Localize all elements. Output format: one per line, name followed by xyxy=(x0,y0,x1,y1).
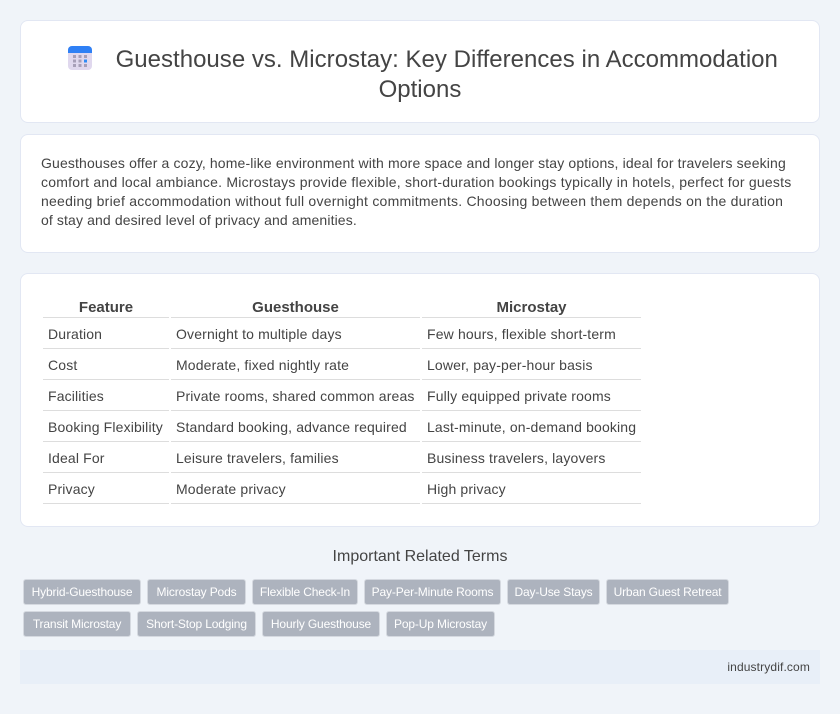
footer source: industrydif.com xyxy=(727,660,810,674)
table header: feature: Feature xyxy=(79,299,133,316)
intro text panel xyxy=(20,134,820,253)
text: Few hours, flexible short-term xyxy=(427,326,616,342)
text: Cost xyxy=(48,357,77,373)
tags: related terms: Pay-Per-Minute Rooms xyxy=(372,585,493,599)
text: Moderate, fixed nightly rate xyxy=(176,357,349,373)
title: Guesthouse vs. Microstay: Key Differences in Accommodation xyxy=(116,46,778,73)
text: Lower, pay-per-hour basis xyxy=(427,357,593,373)
text: Leisure travelers, families xyxy=(176,450,339,466)
footer bar xyxy=(20,650,820,684)
text: Ideal For xyxy=(48,450,105,466)
intro paragraph: Guesthouses offer a cozy, home-like environment with more space and longer stay options, ideal for travelers seeking xyxy=(41,155,786,171)
title: Options xyxy=(379,76,461,103)
tags: related terms: Short-Stop Lodging xyxy=(146,617,247,631)
tags: related terms: Microstay Pods xyxy=(157,585,236,599)
tags: related terms: Flexible Check-In xyxy=(260,585,350,599)
text: Privacy xyxy=(48,481,95,497)
intro paragraph xyxy=(41,155,792,228)
header panel xyxy=(20,20,820,123)
text: Booking Flexibility xyxy=(48,419,163,435)
text: Standard booking, advance required xyxy=(176,419,407,435)
intro paragraph: comfort and local ambiance. Microstays provide flexible, short-duration bookings typically in hotels, perfect for guests xyxy=(41,174,792,190)
table header: guesthouse: Guesthouse xyxy=(252,299,339,316)
comparison table panel xyxy=(20,273,820,527)
text: Private rooms, shared common areas xyxy=(176,388,415,404)
tags: related terms: Urban Guest Retreat xyxy=(614,585,721,599)
text: Last-minute, on-demand booking xyxy=(427,419,636,435)
title xyxy=(116,46,778,103)
text: Business travelers, layovers xyxy=(427,450,606,466)
intro paragraph: of stay and desired level of privacy and amenities. xyxy=(41,212,357,228)
text: Fully equipped private rooms xyxy=(427,388,611,404)
text: Overnight to multiple days xyxy=(176,326,342,342)
text: Facilities xyxy=(48,388,104,404)
text: Duration xyxy=(48,326,102,342)
tags: related terms xyxy=(23,579,729,637)
related terms heading: Important Related Terms xyxy=(333,548,507,565)
tags: related terms: Transit Microstay xyxy=(33,617,121,631)
tags: related terms: Day-Use Stays xyxy=(514,585,593,599)
table header: microstay: Microstay xyxy=(496,299,567,316)
tags: related terms: Hybrid-Guesthouse xyxy=(32,585,132,599)
text: High privacy xyxy=(427,481,506,497)
tags: related terms: Hourly Guesthouse xyxy=(271,617,371,631)
tags: related terms: Pop-Up Microstay xyxy=(394,617,487,631)
icon: calendar xyxy=(68,46,92,70)
text: Moderate privacy xyxy=(176,481,286,497)
intro paragraph: needing brief accommodation without full overnight commitments. Choosing between them depends on the duration xyxy=(41,193,783,209)
